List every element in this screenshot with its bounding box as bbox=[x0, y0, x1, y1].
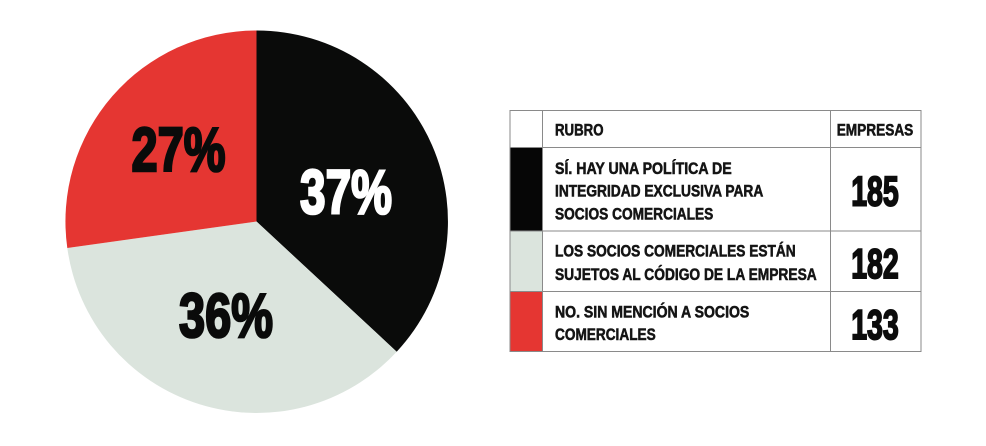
row 2 count: 182 bbox=[851, 240, 899, 287]
pie slice: 37% black bbox=[256, 30, 448, 352]
swatch: red bbox=[510, 292, 542, 352]
pie slice: 36% light grey bbox=[67, 222, 397, 413]
table grid bbox=[510, 110, 921, 352]
row 1 description: SOCIOS COMERCIALES bbox=[555, 205, 713, 223]
pie slice: 27% red bbox=[65, 30, 256, 248]
row 2 description bbox=[555, 242, 817, 284]
row 3 description: COMERCIALES bbox=[555, 326, 656, 344]
swatch: black bbox=[510, 148, 542, 232]
row 3 description bbox=[555, 303, 749, 344]
row 1 description bbox=[555, 159, 764, 223]
row 2 description: SUJETOS AL CÓDIGO DE LA EMPRESA bbox=[555, 265, 817, 284]
row 1 count: 185 bbox=[851, 168, 899, 214]
row 1 description: SÍ. HAY UNA POLÍTICA DE bbox=[555, 159, 732, 178]
row 3 count: 133 bbox=[851, 301, 899, 348]
row 1 description: INTEGRIDAD EXCLUSIVA PARA bbox=[555, 183, 764, 201]
header: RUBRO: RUBRO bbox=[555, 122, 604, 140]
swatch: light grey bbox=[510, 231, 542, 292]
value label: 36%: 36% bbox=[179, 281, 273, 351]
legend table bbox=[510, 110, 921, 352]
value label: 27%: 27% bbox=[132, 115, 226, 185]
value label: 37%: 37% bbox=[300, 158, 392, 228]
header: EMPRESAS: EMPRESAS bbox=[837, 122, 913, 140]
row 3 description: NO. SIN MENCIÓN A SOCIOS bbox=[555, 303, 749, 322]
pie chart bbox=[65, 30, 448, 413]
row 2 description: LOS SOCIOS COMERCIALES ESTÁN bbox=[555, 242, 796, 261]
